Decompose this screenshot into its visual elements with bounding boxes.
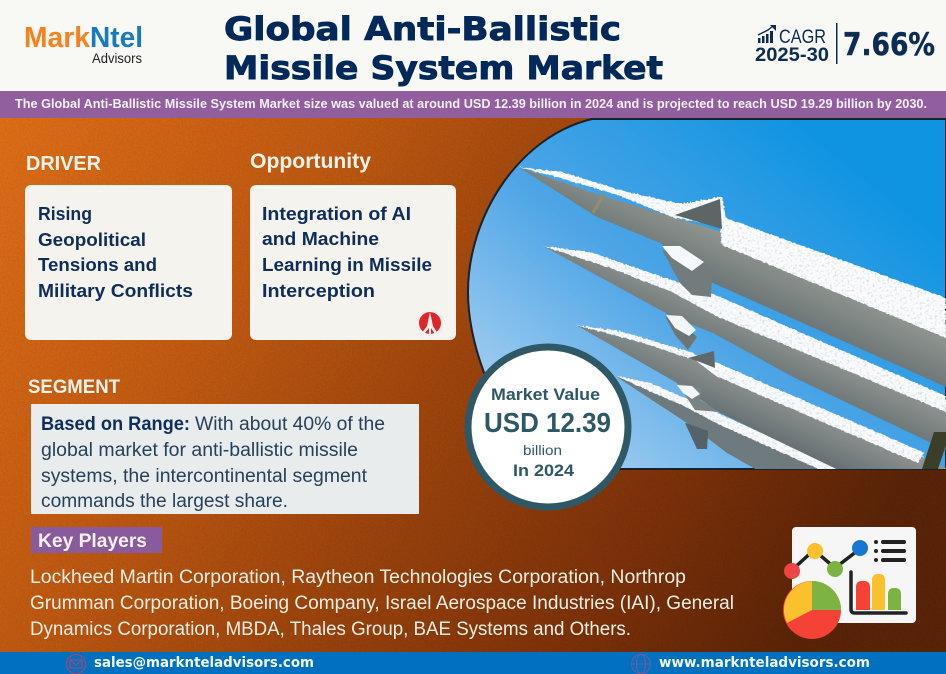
missile 3: [576, 324, 946, 469]
logo: MarkNtel Advisors: Ntel: [90, 22, 143, 54]
icon: red missile emblem: [419, 312, 441, 334]
key players tag: [31, 527, 162, 553]
panel: segment text: global market for anti-ballistic missile: [41, 440, 358, 461]
CAGR block: 2025-30: [755, 45, 829, 66]
icon: growth bars: [758, 25, 776, 43]
panel: driver card: Tensions and: [38, 254, 157, 275]
panel: opportunity card: Interception: [262, 280, 375, 301]
panel: opportunity card: and Machine: [262, 228, 379, 249]
title: [224, 10, 663, 87]
heading: SEGMENT: SEGMENT: [28, 377, 120, 398]
market value badge: USD 12.39: [484, 407, 611, 438]
missile 2: [543, 246, 946, 450]
icon: analytics dashboard: [783, 527, 916, 639]
panel: driver card: Military Conflicts: [38, 280, 193, 301]
CAGR block: [755, 23, 935, 66]
market value badge: Market Value: [491, 385, 600, 404]
panel: segment text: systems, the intercontinental segment: [41, 466, 368, 487]
footer bar: www.marknteladvisors.com: [659, 655, 870, 671]
logo: MarkNtel Advisors: [24, 22, 143, 66]
key players list: Grumman Corporation, Boeing Company, Israel Aerospace Industries (IAI), General: [30, 593, 734, 614]
icon: website: [632, 654, 650, 674]
header band: [0, 0, 946, 92]
panel: opportunity card: Learning in Missile: [262, 254, 432, 275]
key players list: [30, 567, 734, 640]
market value badge: [468, 347, 628, 507]
panel: opportunity card: [250, 185, 456, 340]
footer bar: [0, 652, 946, 674]
purple summary band: The Global Anti-Ballistic Missile System Market size was valued at around USD 12.39 billion in 2024 and is projected to reach USD 19.29 billion by 2030.: [15, 97, 927, 111]
title: Missile System Market: [224, 49, 663, 87]
heading: DRIVER: DRIVER: [26, 153, 102, 175]
heading: Opportunity: Opportunity: [250, 150, 371, 173]
logo: MarkNtel Advisors: Mark: [24, 22, 91, 54]
key players tag: Key Players: [38, 531, 147, 552]
panel: opportunity card: Integration of AI: [262, 203, 411, 224]
panel: driver card: Geopolitical: [38, 229, 146, 250]
market value badge: billion: [523, 442, 562, 458]
title: Global Anti-Ballistic: [224, 10, 621, 48]
panel: segment text: Based on Range:: [41, 414, 190, 435]
panel: segment text: [31, 404, 419, 514]
market value badge: In 2024: [513, 461, 575, 480]
panel: driver card: Rising: [38, 203, 92, 224]
panel: segment text: With about 40% of the: [195, 414, 385, 435]
panel: segment text: commands the largest share.: [41, 491, 288, 512]
purple summary band: [0, 91, 946, 118]
missile 4: [617, 376, 836, 469]
panel: driver card: [25, 185, 232, 340]
key players list: Lockheed Martin Corporation, Raytheon Technologies Corporation, Northrop: [30, 567, 686, 588]
logo: MarkNtel Advisors: Advisors: [92, 51, 142, 66]
footer bar: sales@marknteladvisors.com: [94, 655, 314, 671]
icon: email: [66, 654, 86, 674]
missile 1: [518, 167, 946, 387]
launcher strut: [922, 432, 946, 469]
photo: snow-covered missiles: [468, 119, 946, 490]
textured orange-brown background: [0, 118, 946, 653]
CAGR block: CAGR: [779, 27, 826, 48]
key players list: Dynamics Corporation, MBDA, Thales Group, BAE Systems and Others.: [30, 619, 631, 640]
